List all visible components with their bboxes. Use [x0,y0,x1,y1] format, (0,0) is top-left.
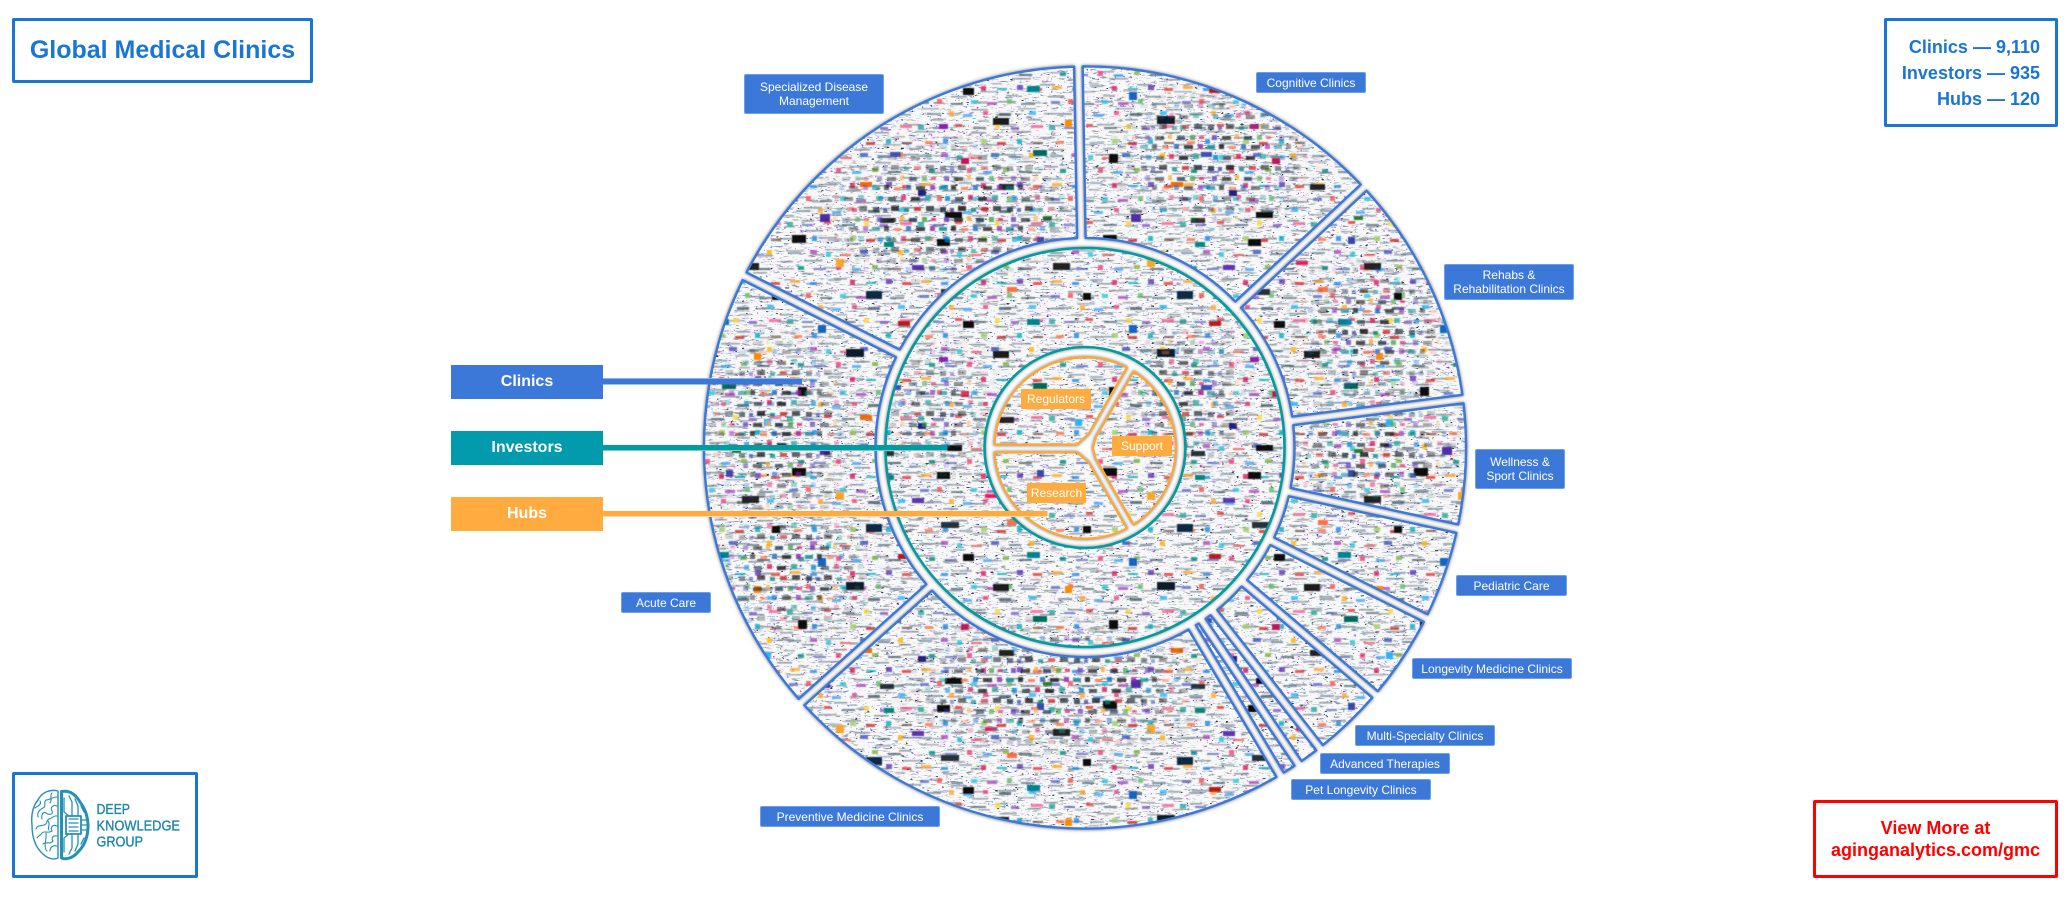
legend connector: Hubs [603,511,1048,517]
label: Rehabs & Rehabilitation Clinics [1444,264,1574,300]
clinics ring sectors [704,66,1466,829]
sector: Longevity Medicine Clinics [1247,545,1424,691]
logo wordmark [96,801,180,850]
logo wordmark: GROUP [96,834,143,850]
logo wordmark: DEEP [96,801,130,818]
sector: Pet Longevity Clinics [1196,624,1294,773]
company logo mosaic [700,60,1470,840]
label: Acute Care: Acute Care [636,596,696,610]
label: Regulators [1021,389,1091,409]
sector: Pediatric Care [1274,496,1456,614]
legend: Investors [451,431,603,465]
label: Pediatric Care [1456,575,1567,596]
investors ring [886,248,1284,647]
label: Multi-Specialty Clinics: Multi-Specialty Clinics [1367,728,1483,742]
label: Wellness & Sport Clinics: Sport Clinics [1486,469,1554,483]
stats panel: Clinics — 9,110 [1909,37,2040,57]
label: Cognitive Clinics: Cognitive Clinics [1267,76,1355,90]
label: Preventive Medicine Clinics: Preventive Medicine Clinics [777,810,923,824]
label: Pet Longevity Clinics [1291,779,1431,800]
title: Global Medical Clinics [30,36,295,64]
legend: Clinics [451,365,603,399]
label: Regulators: Regulators [1027,392,1085,406]
label: Support [1112,436,1172,456]
sector: Specialized Disease Management [747,67,1077,350]
sector: Regulators [995,357,1127,444]
label: Preventive Medicine Clinics [760,806,940,827]
icon: Deep Knowledge Group brain [32,790,88,859]
label: Acute Care [621,592,711,613]
label: Rehabs & Rehabilitation Clinics: Rehabilitation Clinics [1453,282,1565,296]
label: Support: Support [1121,439,1163,453]
sector: Wellness & Sport Clinics [1291,403,1466,524]
sector: Advanced Therapies [1206,615,1316,761]
logo panel: Deep Knowledge Group [12,772,198,878]
label: Pet Longevity Clinics: Pet Longevity Clinics [1305,782,1417,796]
sector: Preventive Medicine Clinics [804,591,1276,829]
legend: Clinics: Clinics [501,373,553,390]
label: Longevity Medicine Clinics [1412,658,1572,679]
legend connector: Investors [603,445,948,451]
label: Research [1027,483,1086,503]
label: Advanced Therapies [1320,753,1450,774]
label: Specialized Disease Management [744,74,884,114]
legend connector: Clinics [603,378,802,384]
call to action: View More at [1881,818,1990,838]
sector: Research [995,452,1127,539]
stats panel [1884,18,2058,127]
sector: Rehabs & Rehabilitation Clinics [1241,191,1462,417]
hubs sectors [995,357,1176,539]
call to action: aginganalytics.com/gmc [1831,840,2040,860]
legend: Hubs: Hubs [507,505,547,522]
label: Cognitive Clinics [1256,72,1366,93]
sector: Multi-Specialty Clinics [1217,587,1372,745]
label: Multi-Specialty Clinics [1355,725,1495,746]
call to action [1813,800,2058,878]
sector: Support [1093,372,1176,524]
sector: Cognitive Clinics [1083,66,1361,301]
label: Wellness & Sport Clinics [1475,449,1565,489]
label: Advanced Therapies: Advanced Therapies [1330,756,1440,770]
legend: Hubs [451,497,603,531]
label: Wellness & Sport Clinics: Wellness & [1490,455,1550,469]
stats panel: Hubs — 120 [1937,89,2040,109]
title [12,18,313,83]
sector: Acute Care [704,280,926,699]
label: Specialized Disease Management: Specialized Disease [760,80,868,94]
label: Research: Research [1031,486,1082,500]
label: Specialized Disease Management: Management [779,94,849,108]
label: Pediatric Care: Pediatric Care [1473,578,1550,592]
sector shadows [704,66,1466,829]
label: Longevity Medicine Clinics: Longevity Medicine Clinics [1421,662,1563,676]
stats panel: Investors — 935 [1902,63,2040,83]
radial ecosystem wheel [31,62,1470,860]
label: Rehabs & Rehabilitation Clinics: Rehabs & [1483,268,1535,282]
legend: Investors: Investors [491,439,563,456]
